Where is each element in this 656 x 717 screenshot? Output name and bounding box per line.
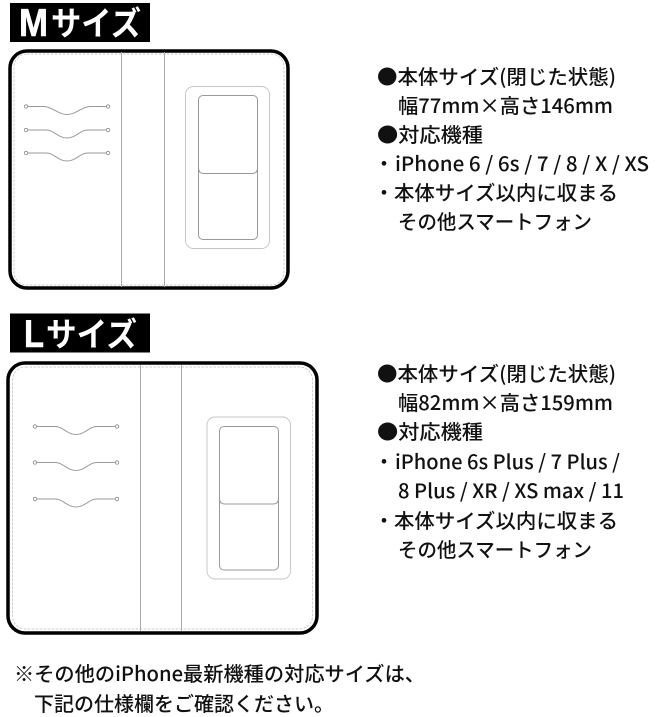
spec text: L size: 8 Plus / XR / XS max / 11 <box>398 475 624 504</box>
heading: L size: L <box>24 313 44 356</box>
spec text: L size: ・ <box>374 446 394 475</box>
spec text: M size: ・ <box>374 148 394 177</box>
spec text: L size: ・ <box>374 505 394 534</box>
spec text: L size: その他スマートフォン <box>398 534 592 563</box>
heading: L size: サイズ <box>46 308 137 356</box>
spec text: M size <box>374 61 649 235</box>
phone holder <box>207 417 290 579</box>
heading: M size: M <box>19 2 48 45</box>
footnote: ※その他のiPhone最新機種の対応サイズは、 <box>14 658 425 687</box>
footnote: 下記の仕様欄をご確認ください。 <box>34 688 334 717</box>
spec text: L size: 幅82mm×高さ159mm <box>398 387 613 416</box>
spec text: M size: その他スマートフォン <box>398 206 592 235</box>
spec text: M size: 本体サイズ以内に収まる <box>394 177 618 206</box>
spec text: L size: ●本体サイズ(閉じた状態) <box>377 358 616 387</box>
spec text: M size: 幅77mm×高さ146mm <box>398 90 613 119</box>
footnote <box>14 658 425 717</box>
spec text: L size <box>374 358 624 563</box>
spec text: M size: iPhone 6 / 6s / 7 / 8 / X / XS <box>395 148 649 177</box>
spec text: M size: ・ <box>374 177 394 206</box>
spec text: L size: iPhone 6s Plus / 7 Plus / <box>395 446 620 475</box>
card slots <box>33 425 119 507</box>
spec text: M size: ●対応機種 <box>377 119 483 148</box>
spec text: M size: ●本体サイズ(閉じた状態) <box>377 61 616 90</box>
diagram: M size case <box>10 51 288 288</box>
phone holder <box>186 86 270 248</box>
spec text: L size: ●対応機種 <box>377 416 483 445</box>
spec text: L size: 本体サイズ以内に収まる <box>394 505 618 534</box>
diagram: L size case <box>8 363 317 633</box>
card slots <box>24 105 110 161</box>
